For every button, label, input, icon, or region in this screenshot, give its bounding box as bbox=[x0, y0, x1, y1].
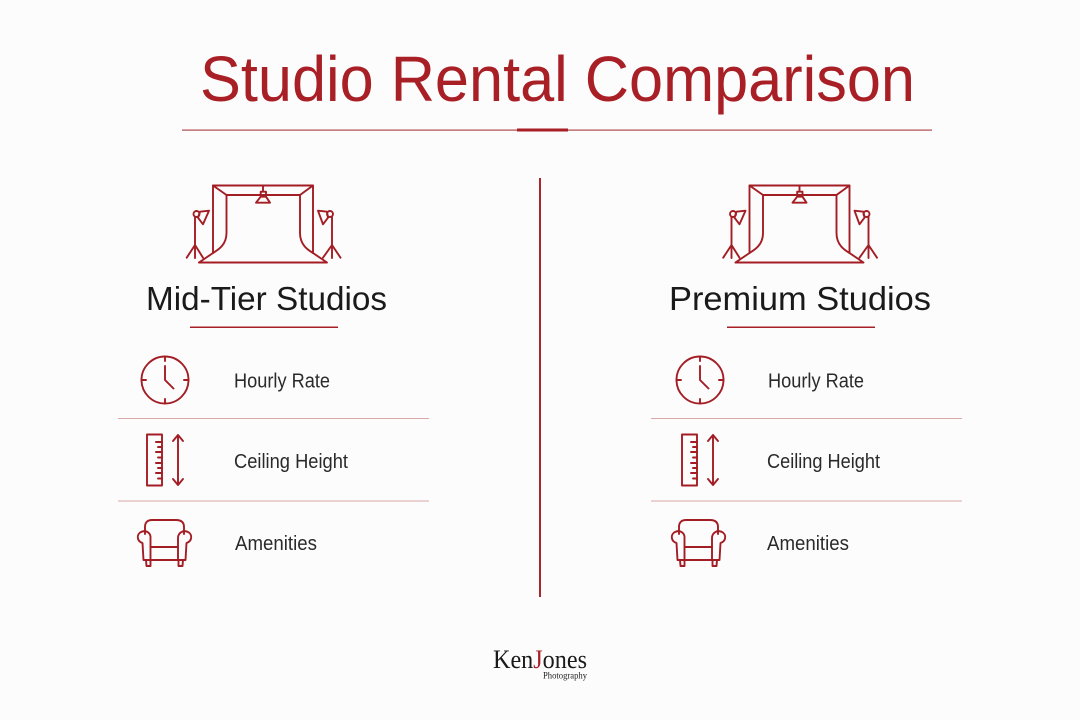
logo: Ken Jones Photography: KenJones bbox=[493, 645, 587, 674]
label: Hourly Rate bbox=[768, 370, 864, 392]
row divider bbox=[651, 418, 962, 419]
panel: mid-tier studios bbox=[118, 186, 429, 566]
label: Amenities bbox=[235, 533, 317, 555]
heading underline bbox=[190, 326, 338, 328]
title underline bbox=[182, 128, 932, 132]
row: hourly rate bbox=[676, 356, 864, 404]
icon: studio backdrop bbox=[723, 186, 877, 262]
logo: Ken Jones Photography: Photography bbox=[543, 672, 587, 682]
center divider bbox=[539, 178, 541, 597]
label: Ceiling Height bbox=[234, 451, 348, 473]
label: Amenities bbox=[767, 533, 849, 555]
icon: armchair bbox=[672, 520, 725, 566]
heading: Premium Studios bbox=[669, 280, 931, 317]
icon: armchair bbox=[138, 520, 191, 566]
label: Hourly Rate bbox=[234, 370, 330, 392]
heading: Mid-Tier Studios bbox=[146, 280, 387, 317]
icon: studio backdrop bbox=[187, 186, 340, 262]
row: ceiling height bbox=[147, 434, 348, 486]
row: amenities bbox=[672, 520, 849, 566]
icon: clock bbox=[676, 356, 724, 404]
row: amenities bbox=[138, 520, 317, 566]
heading underline bbox=[727, 326, 875, 328]
icon: clock bbox=[142, 356, 188, 404]
title: Studio Rental Comparison bbox=[200, 43, 915, 115]
row divider bbox=[118, 500, 429, 502]
icon: ruler and arrow bbox=[682, 434, 718, 486]
row divider bbox=[651, 500, 962, 502]
row divider bbox=[118, 418, 429, 419]
row: hourly rate bbox=[142, 356, 330, 404]
row: ceiling height bbox=[682, 434, 880, 486]
label: Ceiling Height bbox=[767, 451, 880, 473]
panel: premium studios bbox=[651, 186, 962, 566]
icon: ruler and arrow bbox=[147, 434, 183, 486]
